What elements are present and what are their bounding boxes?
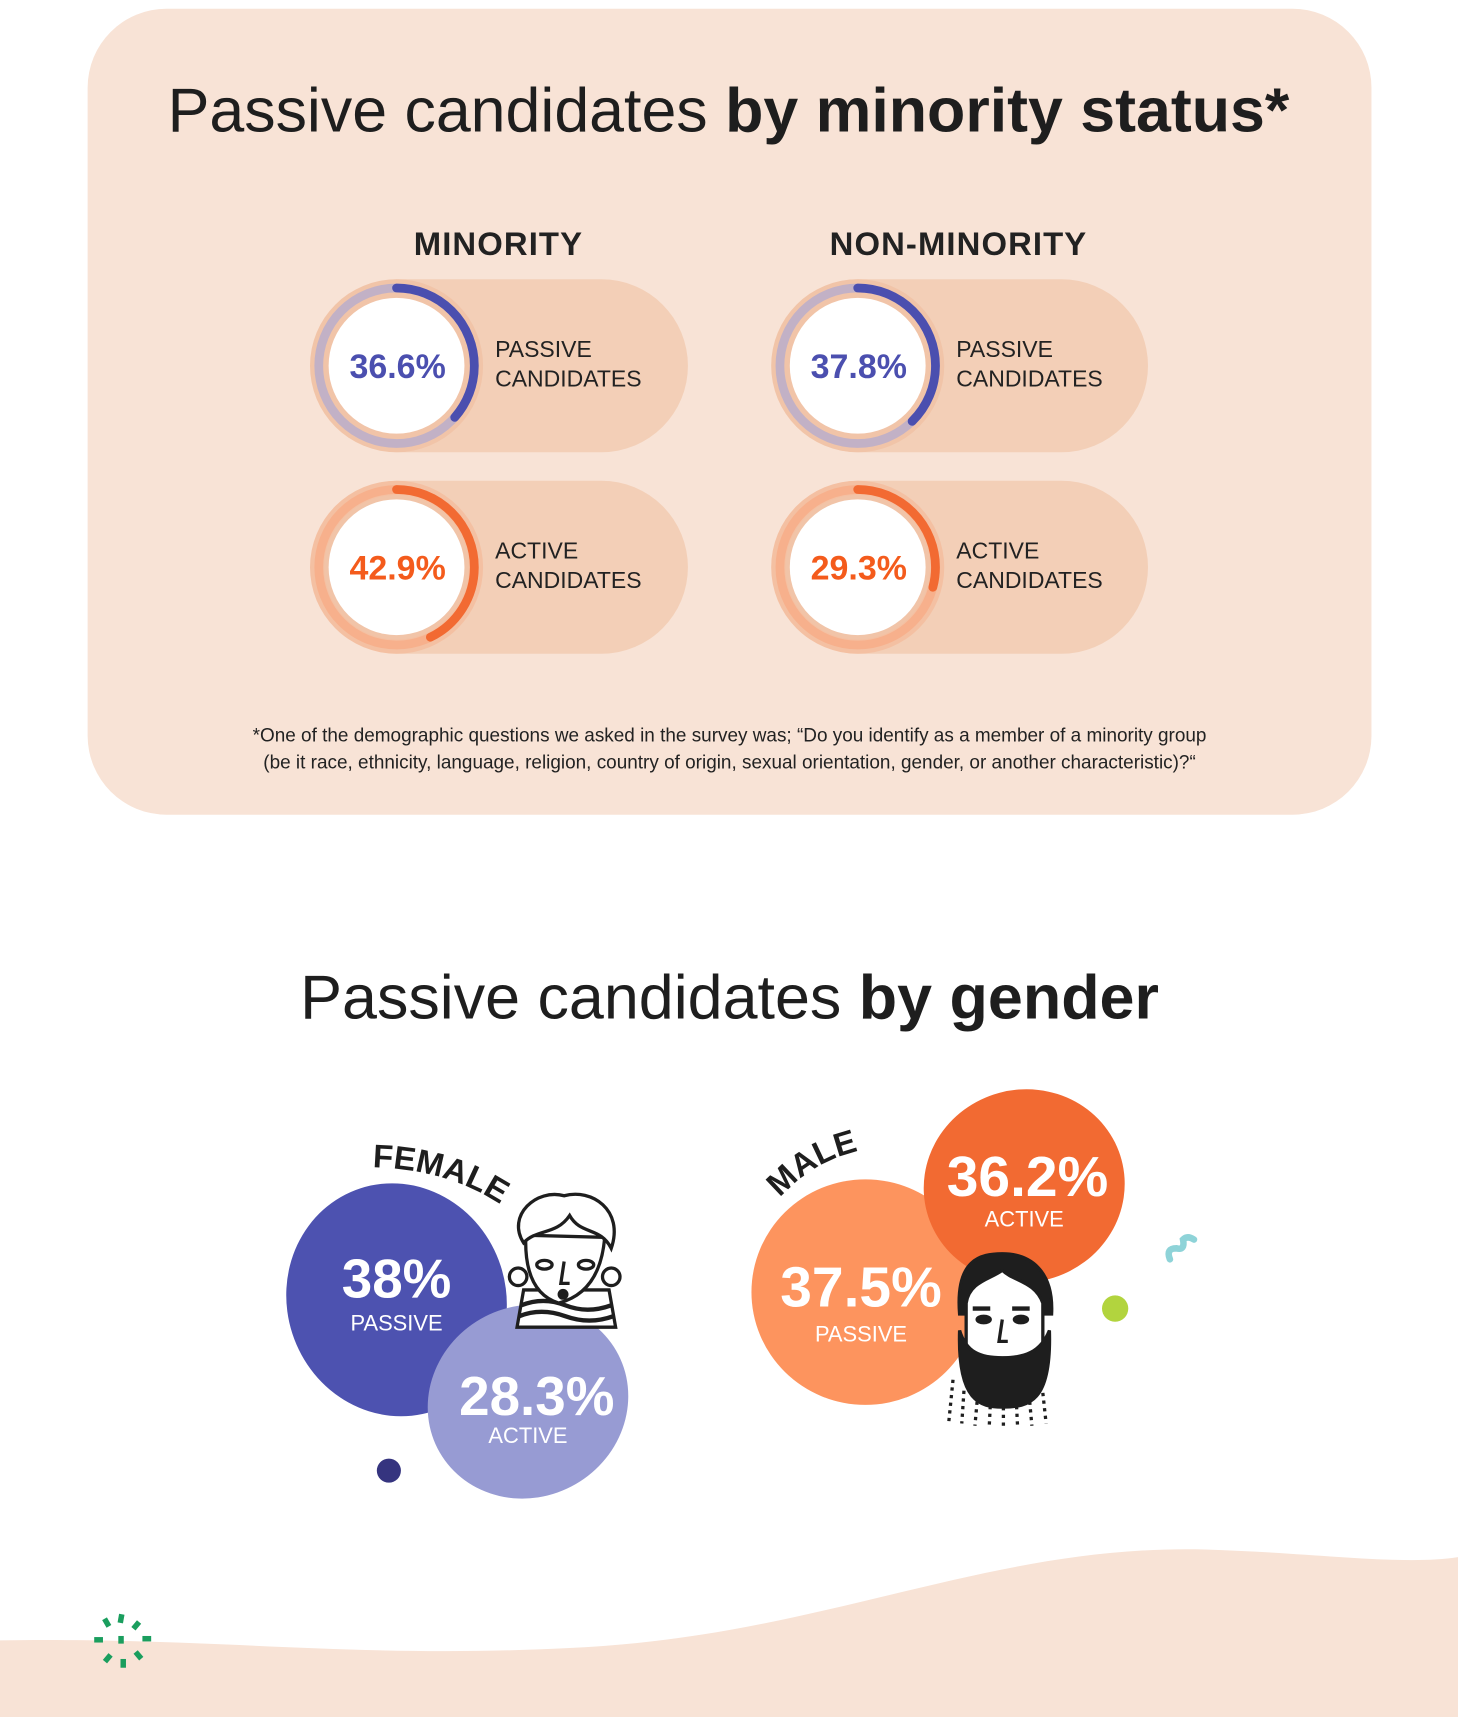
heading: non-minority: NON-MINORITY [830, 225, 1087, 262]
stat: minority active: CANDIDATES [495, 567, 642, 593]
footnote [253, 725, 1206, 774]
blob: male passive [751, 1179, 979, 1405]
chart: female: ACTIVE [488, 1423, 568, 1448]
footnote: *One of the demographic questions we asked in the survey was; “Do you identify as a member of a minority group [253, 725, 1206, 746]
stat: minority passive: CANDIDATES [495, 366, 642, 392]
chart: female: 38% [342, 1248, 451, 1310]
stat: minority passive [310, 279, 688, 452]
heading: minority: MINORITY [414, 225, 583, 262]
footnote: (be it race, ethnicity, language, religion, country of origin, sexual orientation, gender, or another characteristic)?“ [263, 753, 1196, 774]
chart: male: PASSIVE [815, 1321, 907, 1346]
dot [377, 1459, 401, 1483]
icon: male face [949, 1254, 1052, 1428]
icon: logo sparkle [94, 1614, 151, 1668]
panel: minority status [88, 9, 1371, 815]
chart: female: 28.3% [459, 1365, 614, 1427]
icon: squiggle [1169, 1237, 1194, 1259]
stat: minority active: 42.9% [350, 549, 446, 587]
stat: non-minority passive: PASSIVE [956, 336, 1053, 362]
blob: male active [902, 1067, 1147, 1305]
icon: female face [509, 1194, 620, 1327]
chart: male: 37.5% [780, 1255, 942, 1319]
stat: minority passive: 36.6% [350, 348, 446, 386]
bottom wave [0, 1549, 1458, 1717]
chart: male [751, 1089, 1198, 1426]
stat: non-minority active: CANDIDATES [956, 567, 1103, 593]
title: minority: Passive candidates by minority status* [168, 75, 1290, 145]
stat: minority active [310, 481, 688, 654]
blob: female passive [256, 1155, 537, 1445]
stat: non-minority passive: 37.8% [811, 348, 907, 386]
dot: green [1102, 1295, 1128, 1322]
blob: female active [392, 1268, 664, 1535]
chart: female: PASSIVE [351, 1310, 443, 1335]
stat: non-minority active: ACTIVE [956, 537, 1039, 563]
stat: non-minority active: 29.3% [811, 549, 907, 587]
stat: non-minority passive [771, 279, 1148, 452]
stat: minority passive: PASSIVE [495, 336, 592, 362]
chart: female [286, 1144, 628, 1499]
stat: non-minority passive: CANDIDATES [956, 366, 1103, 392]
title: gender: Passive candidates by gender [300, 962, 1159, 1032]
chart: male: 36.2% [947, 1145, 1108, 1209]
stat: non-minority active [771, 481, 1148, 654]
chart: male: ACTIVE [985, 1206, 1064, 1231]
stat: minority active: ACTIVE [495, 537, 578, 563]
label: female: FEMALE [374, 1144, 510, 1204]
label: male: MALE [766, 1130, 858, 1196]
